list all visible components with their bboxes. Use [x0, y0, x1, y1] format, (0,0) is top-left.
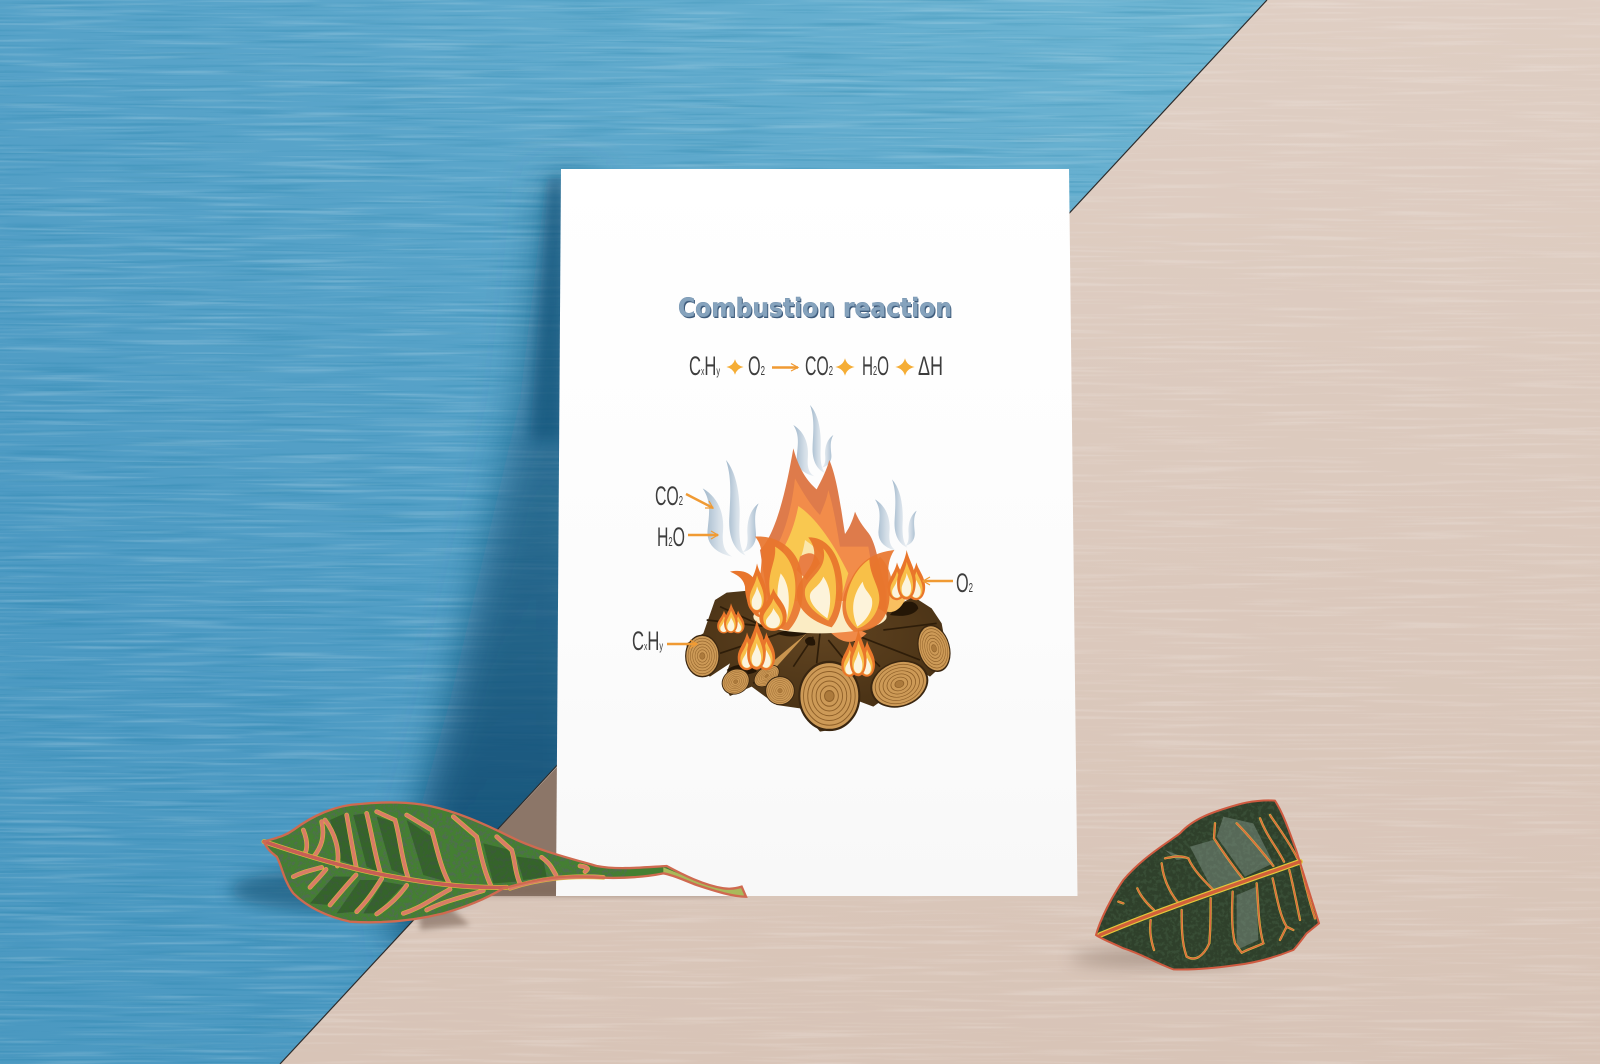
main flame: back layers: [760, 448, 887, 617]
campfire illustration: [686, 405, 955, 732]
paper shadow on wall: [395, 178, 590, 950]
wood mass: [687, 591, 948, 732]
leaf mottling: [1093, 798, 1323, 972]
main flame: side orange tongues: [828, 557, 905, 642]
equation term: fuel: CxHy: [689, 351, 720, 381]
title: Combustion reaction: [679, 295, 953, 325]
plus star 3: [895, 358, 915, 376]
small flame: lower right: [841, 629, 875, 677]
leaf outline: [1096, 800, 1319, 969]
arrow: CxHy: [667, 640, 697, 648]
equation term: oxygen: O2: [748, 351, 765, 381]
leaf outline: [264, 802, 746, 922]
leaf blade: [1096, 800, 1319, 969]
light highlight splinter: [767, 633, 807, 667]
plus star 2: [835, 358, 855, 376]
leaf shadow on wall: [230, 868, 470, 912]
equation term: enthalpy: ΔH: [918, 351, 943, 381]
smoke: top: [793, 405, 833, 476]
right leaf shadow: [1070, 949, 1250, 967]
log end: far left: [686, 635, 719, 677]
arrow: O2: [923, 577, 953, 585]
smoke: right: [875, 479, 917, 551]
small flame: left on log: [717, 603, 745, 633]
chemical equation: [689, 351, 943, 381]
diagonal edge line: [280, 0, 1267, 1064]
label: H2O: H2O: [657, 522, 685, 552]
small flame: lower left: [738, 620, 775, 670]
label: CO2: CO2: [655, 481, 683, 511]
main flame: front left tongue: [755, 537, 803, 631]
plus star 1: [726, 359, 744, 375]
log end: right front: [865, 654, 934, 714]
leaf veins: [1100, 815, 1315, 959]
arrow: CO2: [686, 494, 713, 508]
poster sheet: [556, 169, 1078, 896]
reaction arrow: [772, 364, 798, 371]
main flame: right tongue: [842, 550, 894, 632]
stem: [663, 867, 746, 897]
log end: large front: [799, 662, 859, 730]
leaf pale highlight: [1165, 817, 1273, 950]
log end: far right: [913, 622, 955, 675]
log end: small center sliver: [750, 661, 783, 691]
log end: small center: [766, 677, 794, 705]
wood pile: [686, 591, 955, 732]
equation term: carbon dioxide: CO2: [805, 351, 833, 381]
log end: back left sliver: [718, 664, 754, 699]
label: CxHy: CxHy: [632, 626, 663, 656]
main flame: base glow: [753, 600, 887, 633]
left leaf: [260, 800, 746, 923]
background: blue texture: [0, 0, 1266, 1064]
background: blue wall: [0, 0, 1267, 1064]
floor shadow band under left leaf: [420, 880, 735, 930]
main flame: left side tongues: [730, 563, 787, 631]
leaf blade: [264, 802, 746, 922]
main flame: center tongue: [797, 537, 843, 627]
paper shadow top contact strip: [530, 176, 562, 440]
equation term: water: H2O: [862, 351, 889, 381]
small flame: upper right: [888, 550, 925, 600]
paper shadow on floor: [436, 767, 557, 896]
leaf mottling: [260, 800, 627, 923]
label: O2: O2: [956, 568, 973, 598]
leaf veins: [264, 812, 603, 914]
leaf dark patches: [310, 813, 547, 913]
arrow: H2O: [688, 531, 718, 539]
smoke: left: [703, 460, 759, 557]
right leaf: [1093, 798, 1323, 972]
diagram labels: [632, 481, 973, 656]
title: Combustion reaction: [678, 294, 952, 324]
wood grain lines: [707, 607, 937, 683]
charred holes: [727, 602, 918, 675]
